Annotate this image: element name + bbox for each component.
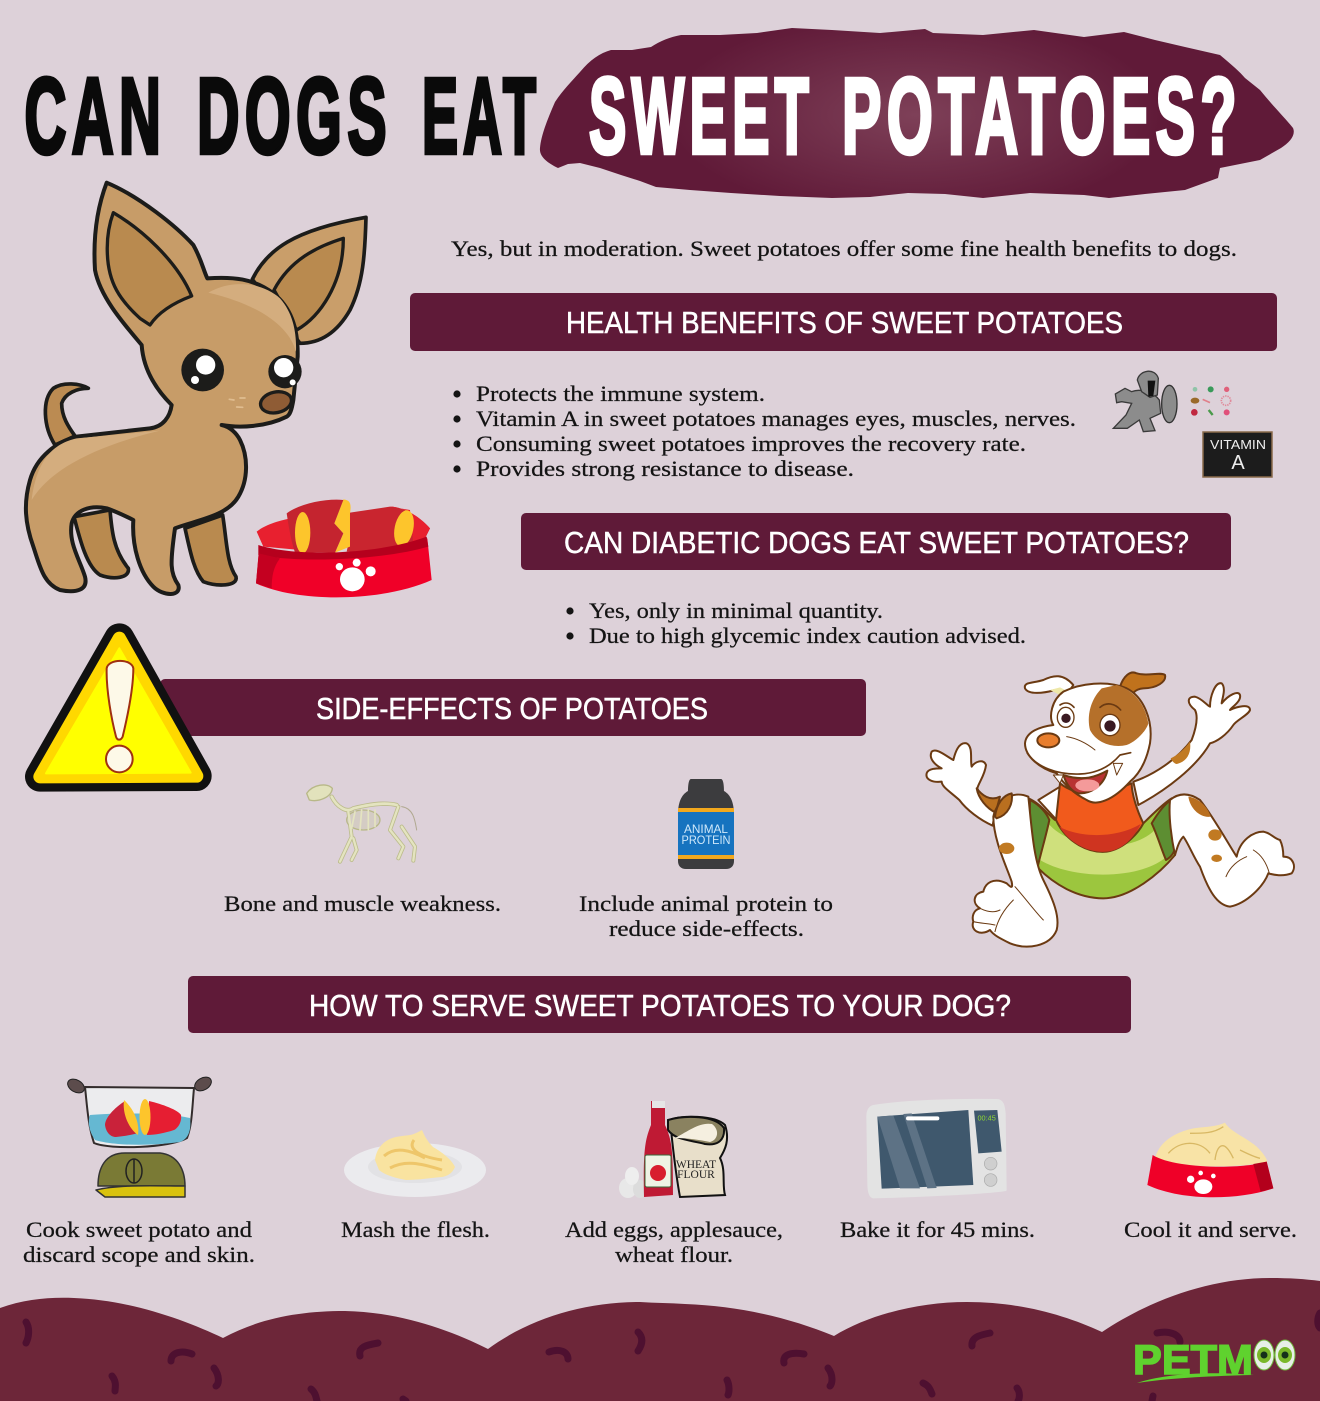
illustration: dog skeleton [307, 785, 417, 862]
icon: ketchup, eggs and wheat flour: WHEAT [676, 1159, 716, 1171]
footer: sweet potato mounds [0, 1278, 1320, 1401]
text: cook sweet potato: Cook sweet potato and [26, 1217, 252, 1242]
text: include animal protein: Include animal protein to [579, 891, 833, 916]
text: include animal protein [579, 891, 833, 941]
intro text: Yes, but in moderation. Sweet potatoes offer some fine health benefits to dogs. [451, 236, 1237, 261]
icon: ketchup, eggs and wheat flour: FLOUR [677, 1169, 715, 1181]
icon: warning triangle [40, 638, 197, 777]
logo: petmoo: PETM [1133, 1336, 1253, 1383]
icon: microwave [867, 1100, 1006, 1197]
icon: mash in dog bowl [1147, 1123, 1273, 1197]
heading: health benefits [410, 293, 1277, 351]
icon: animal protein bottle: ANIMAL [684, 824, 729, 836]
icon: warrior with shield [1113, 371, 1231, 432]
list: health benefits [453, 381, 1076, 481]
title: sweet potatoes blob [540, 28, 1294, 198]
title: can dogs eat: CAN [24, 55, 166, 176]
title: can dogs eat: EAT [422, 55, 541, 176]
text: cool it and serve: Cool it and serve. [1124, 1217, 1297, 1242]
icon: animal protein bottle [678, 779, 734, 869]
illustration: happy jumping dog [926, 672, 1294, 947]
list: health benefits: Provides strong resistance to disease. [476, 456, 854, 481]
icon: ketchup, eggs and wheat flour [619, 1101, 727, 1198]
icon: vitamin a chalkboard [1203, 432, 1272, 477]
text: add eggs, applesauce, wheat flour [565, 1217, 783, 1267]
text: add eggs, applesauce, wheat flour: wheat flour. [615, 1242, 733, 1267]
heading: side-effects: SIDE-EFFECTS OF POTATOES [316, 691, 708, 726]
icon: mashed potato on plate [344, 1130, 486, 1197]
list: health benefits: Consuming sweet potatoes improves the recovery rate. [476, 431, 1026, 456]
text: bake it: Bake it for 45 mins. [840, 1217, 1035, 1242]
list: diabetic dogs: Yes, only in minimal quantity. [589, 598, 883, 623]
list: diabetic dogs: Due to high glycemic index caution advised. [589, 623, 1026, 648]
text: add eggs, applesauce, wheat flour: Add eggs, applesauce, [565, 1217, 783, 1242]
icon: microwave: 00:45 [977, 1114, 996, 1123]
list: health benefits: Vitamin A in sweet potatoes manages eyes, muscles, nerves. [476, 406, 1076, 431]
text: bone and muscle weakness: Bone and muscle weakness. [224, 891, 501, 916]
heading: diabetic dogs: CAN DIABETIC DOGS EAT SWEET POTATOES? [564, 525, 1189, 560]
text: cook sweet potato: discard scope and skin. [23, 1242, 255, 1267]
heading: how to serve [188, 976, 1131, 1033]
text: include animal protein: reduce side-effects. [609, 916, 804, 941]
title: sweet potatoes blob: SWEET [589, 55, 814, 176]
icon: vitamin a chalkboard: A [1231, 452, 1245, 474]
text: cook sweet potato [23, 1217, 255, 1267]
text: mash the flesh: Mash the flesh. [341, 1217, 490, 1242]
illustration: bowl of sweet potatoes [256, 499, 432, 597]
title: can dogs eat [24, 55, 541, 176]
heading: side-effects [160, 679, 866, 736]
list: health benefits: Protects the immune system. [476, 381, 765, 406]
icon: pot on scale [65, 1074, 214, 1197]
icon: animal protein bottle: PROTEIN [682, 835, 730, 847]
title: can dogs eat: DOGS [197, 55, 392, 176]
icon: vitamin a chalkboard: VITAMIN [1210, 438, 1266, 452]
illustration: chihuahua [26, 183, 366, 594]
heading: health benefits: HEALTH BENEFITS OF SWEET POTATOES [566, 305, 1123, 340]
list: diabetic dogs [566, 598, 1026, 648]
heading: how to serve: HOW TO SERVE SWEET POTATOES TO YOUR DOG? [309, 988, 1011, 1023]
heading: diabetic dogs [521, 513, 1231, 570]
